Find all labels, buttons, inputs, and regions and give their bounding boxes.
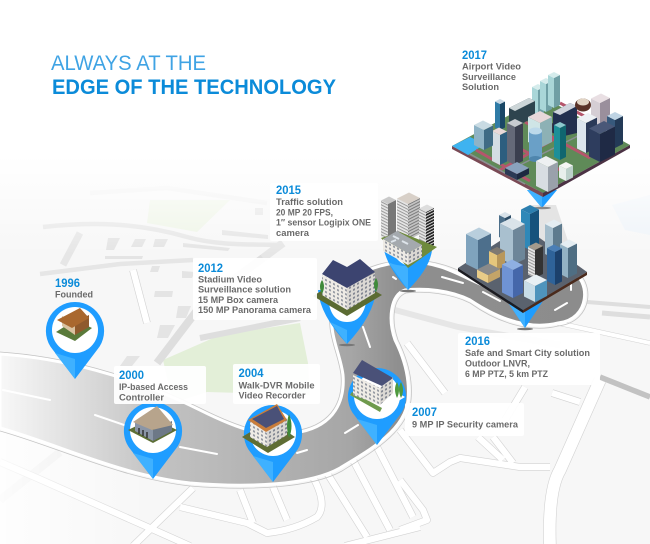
pin: 2012	[318, 290, 376, 346]
label: 2015	[270, 183, 378, 241]
2017 label: Airport Video	[462, 62, 521, 72]
label: 2000	[114, 366, 206, 404]
pin: 2000	[124, 402, 182, 479]
label: 2012	[193, 258, 317, 320]
label: 2015: 1″ sensor Logipix ONE	[276, 218, 372, 228]
label: 2012: Surveillance solution	[198, 284, 291, 296]
label: 2015: 2015	[276, 185, 302, 197]
label: 1996: 1996	[55, 278, 80, 290]
building: 2015 towers	[381, 192, 437, 268]
pin: 2017 tail	[527, 190, 575, 262]
label: 1996	[55, 278, 93, 300]
2017 label	[462, 50, 521, 93]
label: 2012: 15 MP Box camera	[198, 295, 279, 306]
pin: 1996	[46, 302, 104, 379]
label: 2012: Stadium Video	[198, 274, 262, 286]
road dashes	[3, 277, 571, 454]
label: 2004: Walk-DVR Mobile	[238, 380, 314, 392]
label: 2015: 20 MP 20 FPS,	[276, 208, 333, 218]
label: 2012: 150 MP Panorama camera	[198, 305, 312, 316]
label: 2016: 6 MP PTZ, 5 km PTZ	[465, 369, 548, 380]
label: 2015: Traffic solution	[276, 197, 343, 208]
pin: 2007	[348, 368, 406, 445]
label: 2016: 2016	[465, 336, 490, 348]
label: 2004: Video Recorder	[238, 390, 306, 402]
label: 1996: Founded	[55, 290, 93, 300]
label: 2000: IP-based Access	[119, 382, 188, 393]
pin: 2015	[384, 250, 432, 292]
building: 2007	[350, 360, 405, 412]
label: 2004: 2004	[238, 368, 264, 380]
map green park	[163, 323, 310, 403]
title: ALWAYS AT THE	[51, 52, 206, 75]
label: 2004	[233, 364, 320, 404]
label: 2016	[458, 333, 600, 385]
label: 2007	[405, 403, 524, 436]
label: 2007: 9 MP IP Security camera	[412, 420, 519, 430]
2017 label: Surveillance	[462, 72, 516, 83]
house: 1996	[56, 308, 92, 341]
house: 2000	[128, 406, 177, 443]
label: 2000: 2000	[119, 370, 144, 382]
building: teal trio	[532, 72, 560, 118]
pin: 2016	[505, 298, 545, 330]
label: 2000: Controller	[119, 392, 164, 404]
road	[0, 260, 588, 488]
label: 2012: 2012	[198, 263, 223, 275]
city: 2017 airport	[452, 50, 630, 197]
city: 2016 smart city	[458, 205, 587, 313]
2017 label: 2017	[462, 50, 487, 62]
title	[51, 52, 336, 99]
label: 2015: camera	[276, 228, 310, 239]
building: 2012 stadium	[313, 259, 382, 316]
label: 2016: Safe and Smart City solution	[465, 348, 590, 359]
title: EDGE OF THE TECHNOLOGY	[52, 76, 336, 99]
label: 2007: 2007	[412, 407, 437, 419]
map street casings	[0, 270, 650, 544]
label: 2016: Outdoor LNVR,	[465, 358, 530, 370]
house: 2004	[242, 404, 295, 453]
pin: 2004	[244, 405, 302, 482]
map street fills	[0, 270, 650, 544]
2017 label: Solution	[462, 82, 499, 93]
